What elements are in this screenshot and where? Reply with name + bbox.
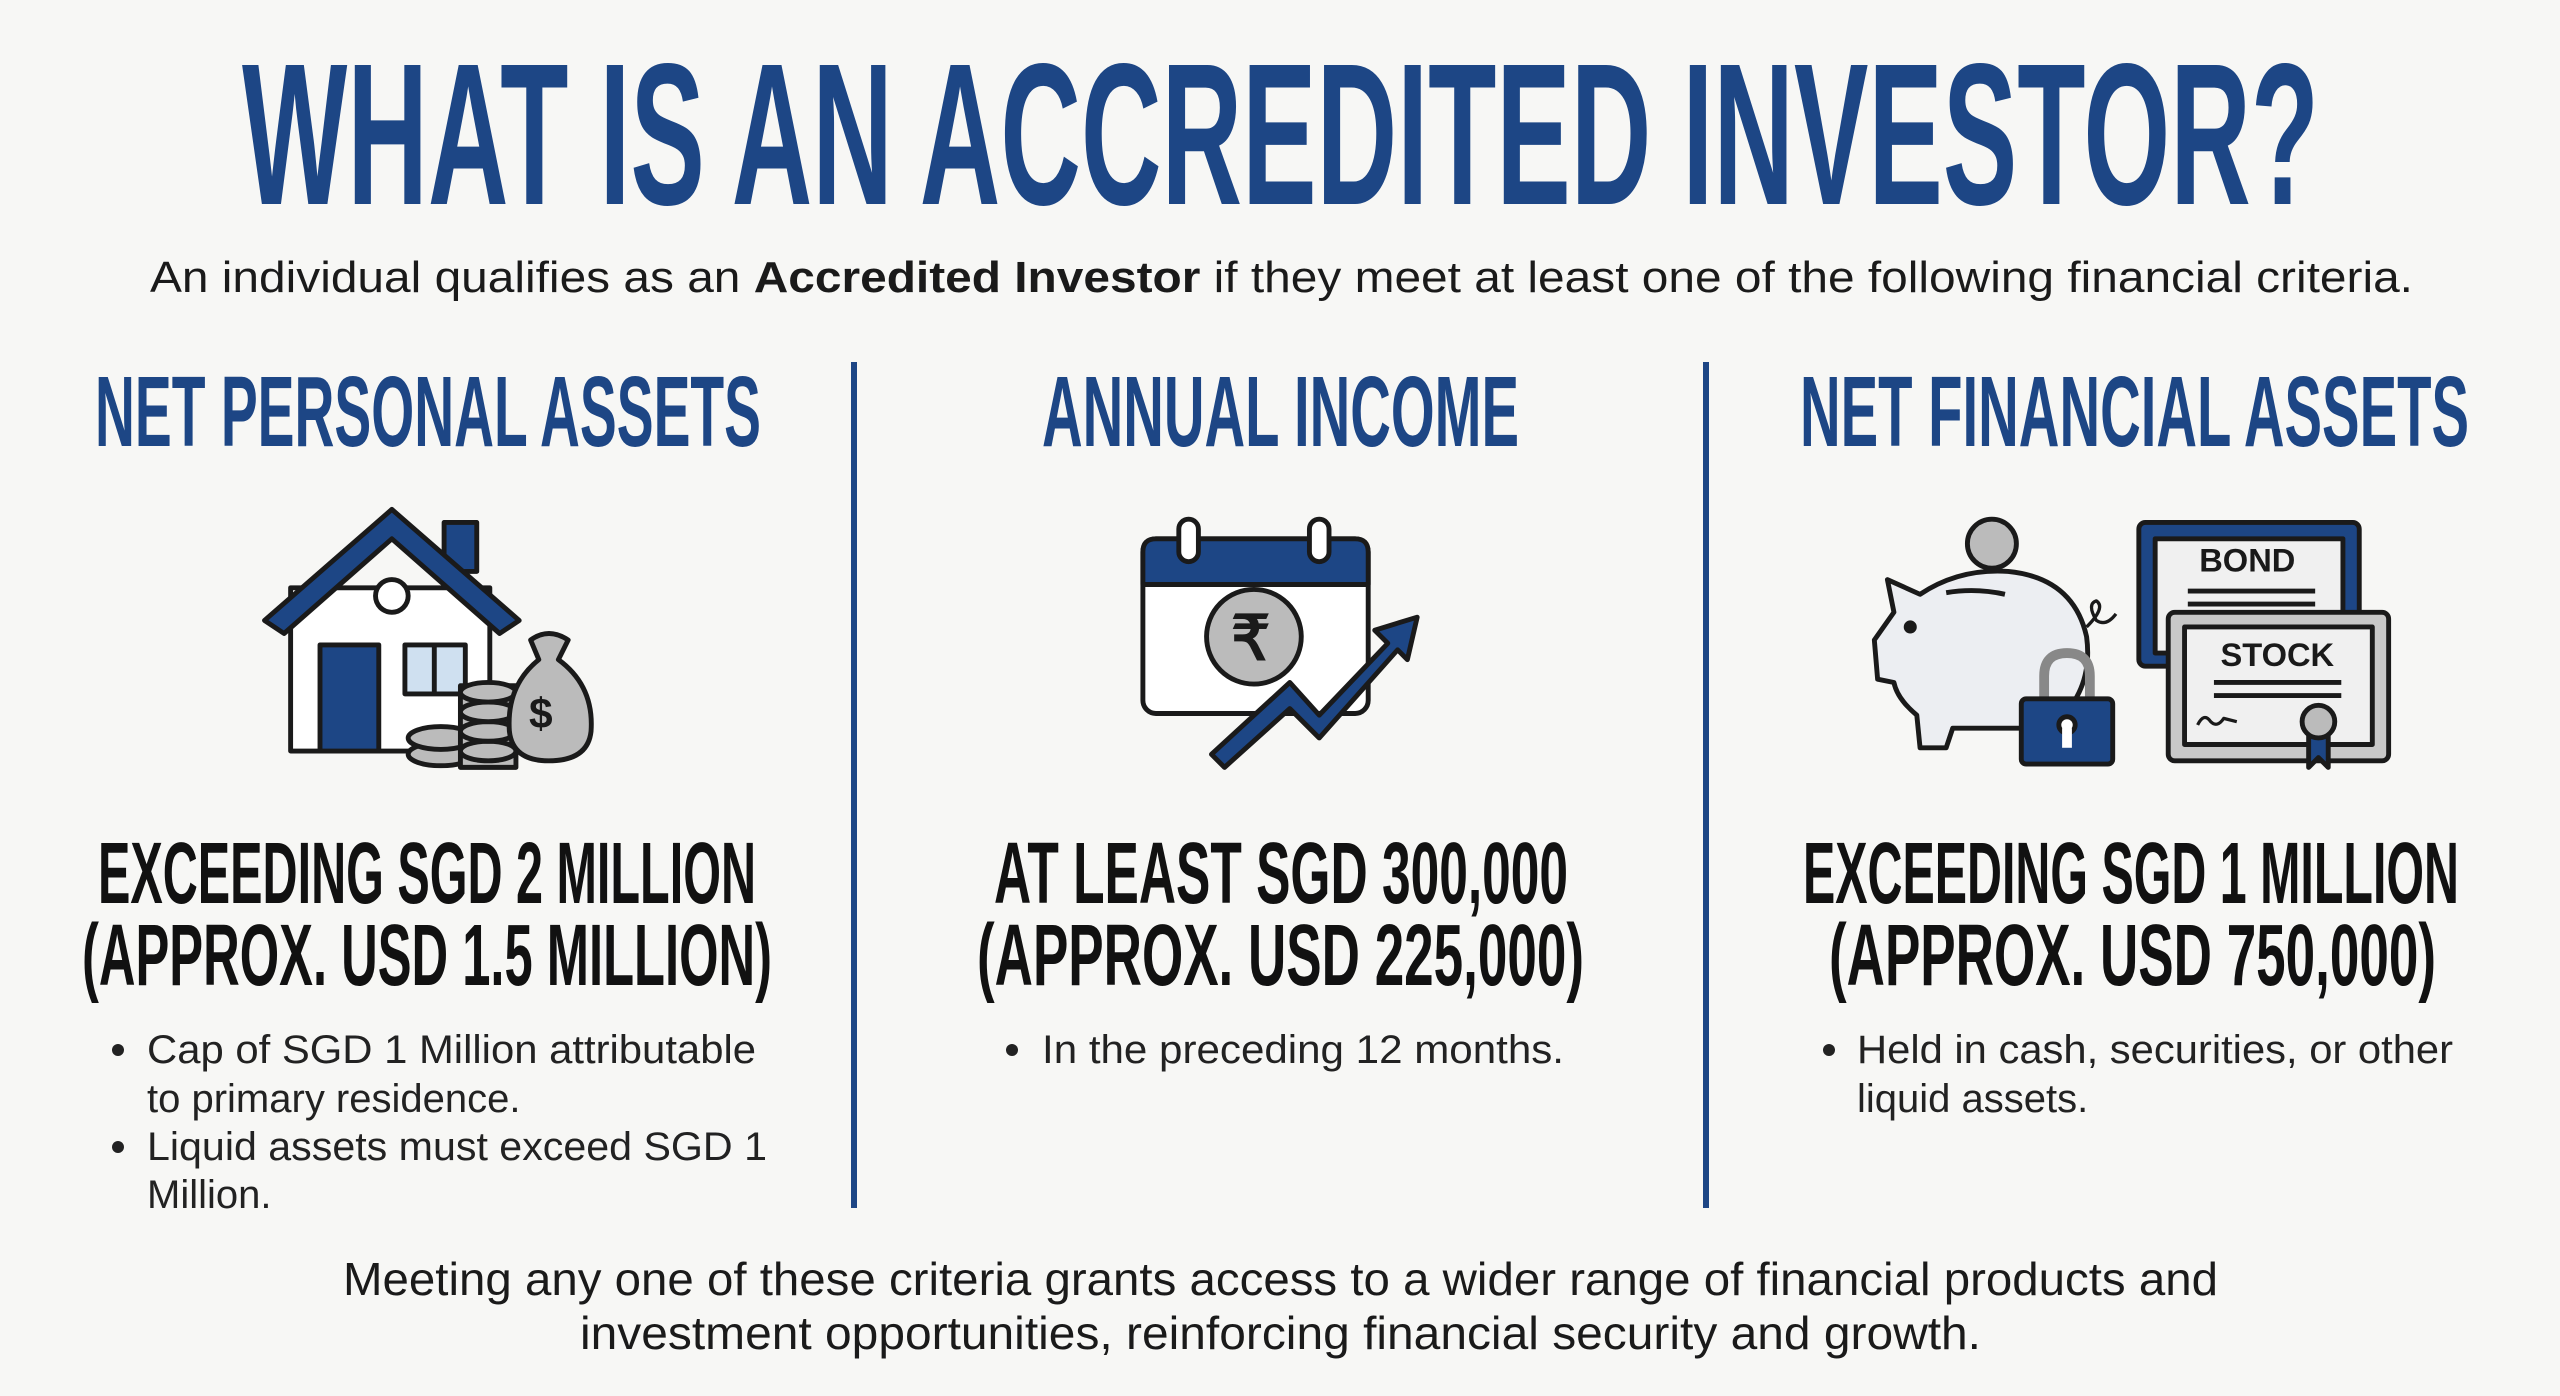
bullet: annual income: In the preceding 12 months. [1042,1028,1564,1072]
heading: net personal assets: NET PERSONAL ASSETS [95,356,761,468]
bullets: net personal assets: Million. [147,1173,271,1217]
icon: piggy bank, lock, bond and stock certificates: BOND [2199,541,2295,578]
divider lines [854,362,1706,1208]
icon: piggy bank, lock, bond and stock certificates: STOCK [2220,636,2335,673]
panel: net personal assets [82,356,772,1217]
bullet: net financial assets [1823,1028,2453,1121]
bullet: net financial assets: Held in cash, securities, or other [1857,1028,2453,1072]
bullets: net personal assets: to primary residence. [147,1077,520,1121]
value: annual income: AT LEAST SGD 300,000 [994,825,1568,922]
icon: calendar with rupee and rising arrow [1143,519,1417,767]
footer text [343,1253,2218,1359]
heading: annual income: ANNUAL INCOME [1042,356,1519,468]
panel: annual income [977,356,1584,1072]
icon: calendar with rupee and rising arrow: ₹ [1231,605,1271,674]
icon: piggy bank, lock, bond and stock certificates [1874,519,2389,767]
bullets: net personal assets: Liquid assets must exceed SGD 1 [147,1125,767,1169]
footer text: investment opportunities, reinforcing financial security and growth. [580,1307,1981,1359]
subtitle: An individual qualifies as an Accredited Investor if they meet at least one of the following financial criteria. [150,253,2413,302]
bullets: net personal assets: Cap of SGD 1 Million attributable [147,1028,756,1072]
footer text: Meeting any one of these criteria grants access to a wider range of financial products and [343,1253,2218,1305]
value: net personal assets: EXCEEDING SGD 2 MILLION [98,825,756,922]
panel: net personal assets: (APPROX. USD 1.5 MILLION) [82,907,772,1004]
bullet: net financial assets: liquid assets. [1857,1077,2088,1121]
icon: house with coins and money bag [264,509,591,767]
panel: net financial assets [1800,356,2469,1121]
icon: house with coins and money bag: $ [529,690,553,737]
bullets: net personal assets [112,1028,767,1217]
panel: annual income: (APPROX. USD 225,000) [977,907,1584,1004]
